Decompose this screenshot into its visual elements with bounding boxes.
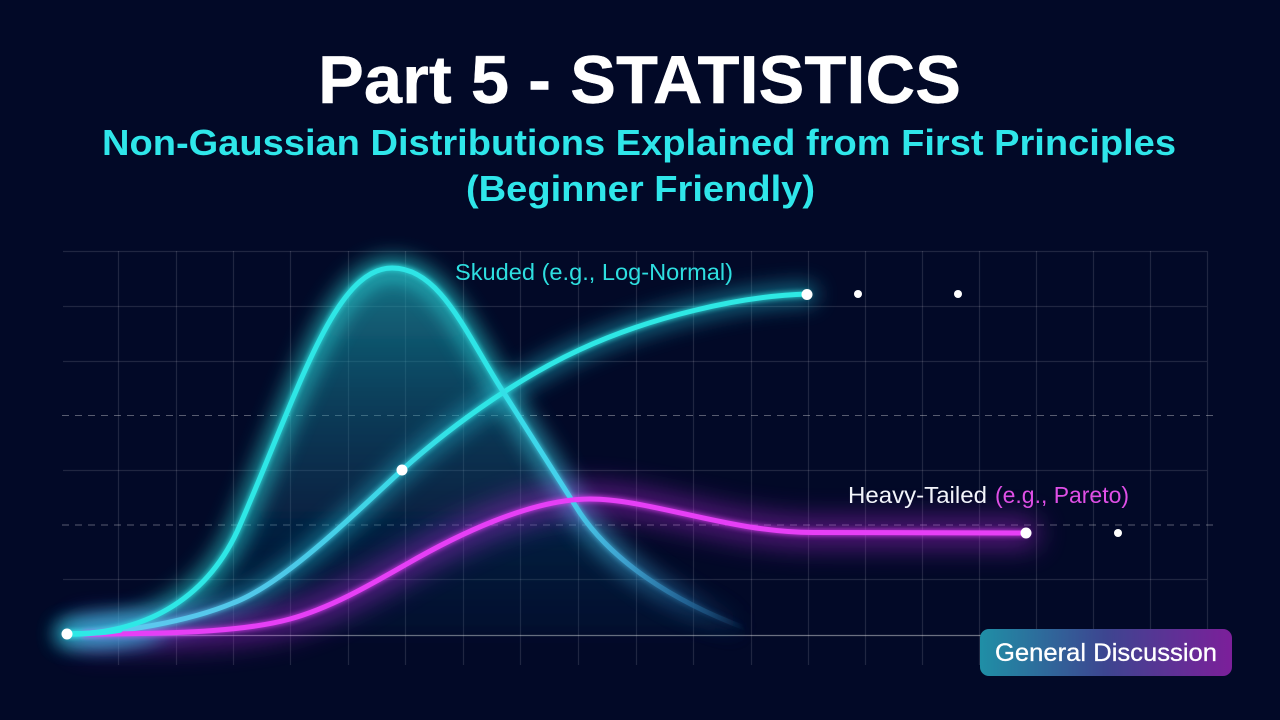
heavy-tailed curve — [85, 499, 1026, 634]
subtitle: (Beginner Friendly) — [466, 168, 815, 209]
area under skewed curve — [67, 268, 745, 636]
subtitle: Non-Gaussian Distributions Explained from First Principles — [102, 122, 1176, 163]
rising cumulative curve — [67, 294, 807, 634]
badge: General Discussion: General Discussion — [995, 639, 1217, 667]
label: heavy-tailed — [848, 482, 1129, 508]
data points — [62, 289, 1122, 640]
subtitle — [102, 122, 1176, 209]
label: skewed: Skuded (e.g., Log-Normal) — [455, 259, 733, 285]
chart grid — [62, 251, 1213, 665]
badge: General Discussion — [980, 629, 1232, 676]
glow layers — [67, 268, 1026, 634]
label: heavy-tailed: (e.g., Pareto) — [995, 482, 1129, 508]
chart: distribution curves — [62, 251, 1213, 665]
title: Part 5 - STATISTICS — [318, 42, 961, 118]
tight glow — [67, 268, 1026, 634]
skewed distribution curve — [67, 268, 745, 634]
shared curve origin — [67, 630, 120, 634]
start glow — [62, 614, 162, 646]
label: heavy-tailed: Heavy-Tailed — [848, 482, 987, 508]
